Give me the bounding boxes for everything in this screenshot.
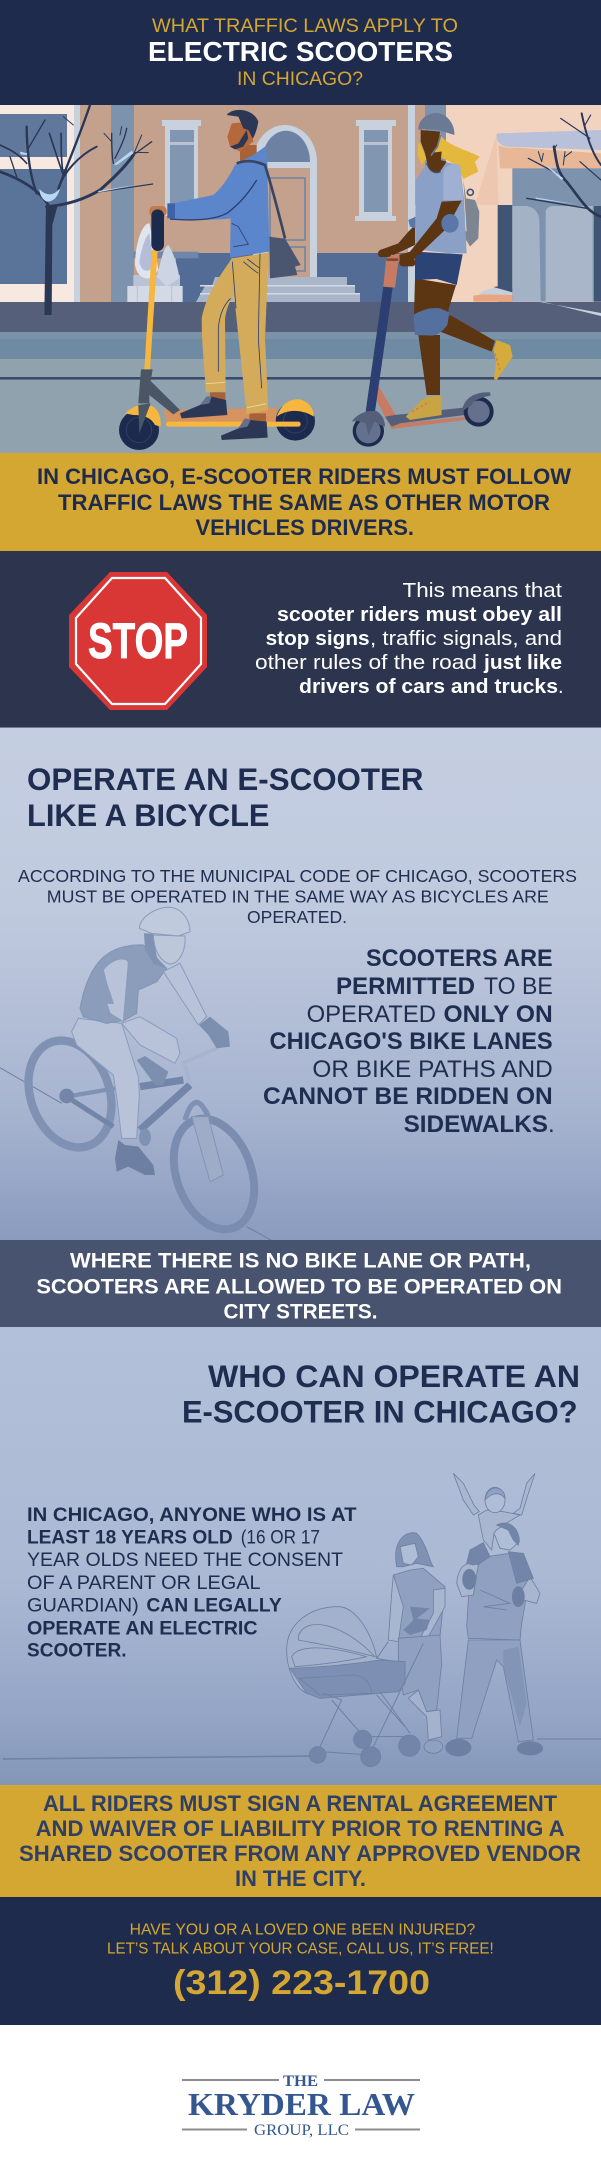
icon: stop sign — [69, 572, 207, 710]
banner: rental agreement: ALL RIDERS MUST SIGN A RENTAL AGREEMENT — [43, 1791, 558, 1816]
heading: operate like a bicycle: LIKE A BICYCLE — [27, 797, 270, 833]
text: where scooters are permitted: TO BE — [484, 973, 553, 1000]
text: age requirement: CAN LEGALLY — [146, 1595, 282, 1617]
panel: call to action: LET’S TALK ABOUT YOUR CASE, CALL US, IT’S FREE! — [107, 1940, 494, 1957]
text: where scooters are permitted — [263, 945, 555, 1138]
banner: rental agreement: SHARED SCOOTER FROM ANY APPROVED VENDOR — [19, 1841, 581, 1866]
text: age requirement: LEAST 18 YEARS OLD — [27, 1526, 233, 1548]
ground lines — [3, 1739, 601, 1759]
man with child on shoulders — [446, 1473, 543, 1756]
banner: follow traffic laws: IN CHICAGO, E-SCOOTER RIDERS MUST FOLLOW — [37, 464, 572, 489]
woman rider — [378, 113, 513, 420]
panel: call to action: HAVE YOU OR A LOVED ONE BEEN INJURED? — [130, 1921, 475, 1938]
heading: operate like a bicycle — [27, 761, 424, 833]
banner: no bike lane — [0, 1240, 601, 1327]
text: age requirement: (16 OR 17 — [241, 1526, 320, 1548]
banner: follow traffic laws: VEHICLES DRIVERS. — [196, 515, 414, 540]
text: where scooters are permitted: SIDEWALKS — [404, 1111, 548, 1138]
heading: who can operate: WHO CAN OPERATE AN — [208, 1358, 580, 1394]
banner: no bike lane: CITY STREETS. — [224, 1300, 378, 1324]
banner: no bike lane: WHERE THERE IS NO BIKE LANE OR PATH, — [70, 1248, 531, 1272]
icon: stop sign: STOP — [88, 613, 188, 669]
header: title band: WHAT TRAFFIC LAWS APPLY TO — [152, 16, 458, 37]
text: what the law means: drivers of cars and trucks — [299, 676, 558, 698]
banner: rental agreement: IN THE CITY. — [235, 1866, 366, 1891]
heading: who can operate — [182, 1358, 580, 1430]
header: title band — [0, 0, 601, 105]
banner: follow traffic laws: TRAFFIC LAWS THE SAME AS OTHER MOTOR — [58, 490, 550, 515]
right tree — [527, 113, 601, 217]
text: where scooters are permitted: SCOOTERS ARE — [366, 945, 553, 972]
illustration: family with stroller — [287, 1473, 543, 1767]
text: where scooters are permitted: CANNOT BE RIDDEN ON — [263, 1083, 553, 1110]
text: age requirement: YEAR OLDS NEED THE CONSENT — [27, 1549, 343, 1571]
phone number: (312) 223-1700 — [173, 1964, 430, 2002]
footer — [0, 2025, 601, 2184]
banner: rental agreement: AND WAIVER OF LIABILITY PRIOR TO RENTING A — [36, 1816, 565, 1841]
panel: operate like a bicycle — [0, 728, 601, 1241]
text: municipal code — [18, 866, 577, 927]
panel: stop sign message — [0, 551, 601, 728]
text: what the law means: This means that — [402, 580, 562, 602]
logo: The Kryder Law Group: KRYDER LAW — [188, 2086, 415, 2122]
text: age requirement: SCOOTER. — [27, 1640, 126, 1662]
illustration: cyclist — [0, 907, 273, 1241]
heading: who can operate: E-SCOOTER IN CHICAGO? — [182, 1394, 578, 1430]
text: where scooters are permitted: OR BIKE PATHS AND — [312, 1056, 553, 1083]
text: where scooters are permitted: OPERATED — [307, 1001, 436, 1028]
text: age requirement: OF A PARENT OR LEGAL — [27, 1572, 261, 1594]
logo: The Kryder Law Group: GROUP, LLC — [254, 2122, 349, 2139]
text: municipal code: OPERATED. — [247, 907, 347, 927]
street scene background — [0, 105, 601, 453]
banner: follow traffic laws — [0, 453, 601, 551]
scooter: yellow — [119, 206, 315, 450]
text: what the law means — [255, 580, 564, 698]
logo: The Kryder Law Group: THE — [283, 2073, 318, 2090]
banner: no bike lane: SCOOTERS ARE ALLOWED TO BE OPERATED ON — [36, 1274, 562, 1298]
logo: The Kryder Law Group — [182, 2073, 420, 2139]
heading: operate like a bicycle: OPERATE AN E-SCOOTER — [27, 761, 424, 797]
text: what the law means: . — [558, 676, 564, 698]
header: title band: ELECTRIC SCOOTERS — [148, 36, 453, 67]
man rider — [167, 110, 301, 440]
panel: who can operate — [0, 1327, 601, 1785]
text: what the law means: just like — [483, 652, 562, 674]
text: age requirement — [27, 1504, 357, 1662]
text: municipal code: ACCORDING TO THE MUNICIPAL CODE OF CHICAGO, SCOOTERS — [18, 866, 577, 886]
text: age requirement: IN CHICAGO, ANYONE WHO IS AT — [27, 1504, 357, 1526]
panel: call to action — [0, 1897, 601, 2025]
text: where scooters are permitted: CHICAGO'S BIKE LANES — [270, 1028, 553, 1055]
text: where scooters are permitted: . — [548, 1111, 555, 1138]
stroller — [287, 1607, 423, 1767]
text: what the law means: other rules of the road — [255, 652, 477, 674]
text: age requirement: OPERATE AN ELECTRIC — [27, 1617, 258, 1639]
text: what the law means: scooter riders must obey all — [277, 604, 562, 626]
text: what the law means: stop signs — [266, 628, 370, 650]
text: age requirement: GUARDIAN) — [27, 1595, 139, 1617]
text: what the law means: , traffic signals, and — [370, 628, 562, 650]
banner: rental agreement — [0, 1785, 601, 1898]
text: where scooters are permitted: PERMITTED — [336, 973, 475, 1000]
header: title band: IN CHICAGO? — [237, 68, 363, 90]
left tree — [0, 105, 153, 315]
text: where scooters are permitted: ONLY ON — [444, 1001, 553, 1028]
text: municipal code: MUST BE OPERATED IN THE SAME WAY AS BICYCLES ARE — [47, 886, 549, 906]
woman — [388, 1533, 445, 1753]
scooter: navy and coral — [352, 254, 494, 447]
illustration: two riders on e-scooters on a city street — [0, 105, 601, 453]
